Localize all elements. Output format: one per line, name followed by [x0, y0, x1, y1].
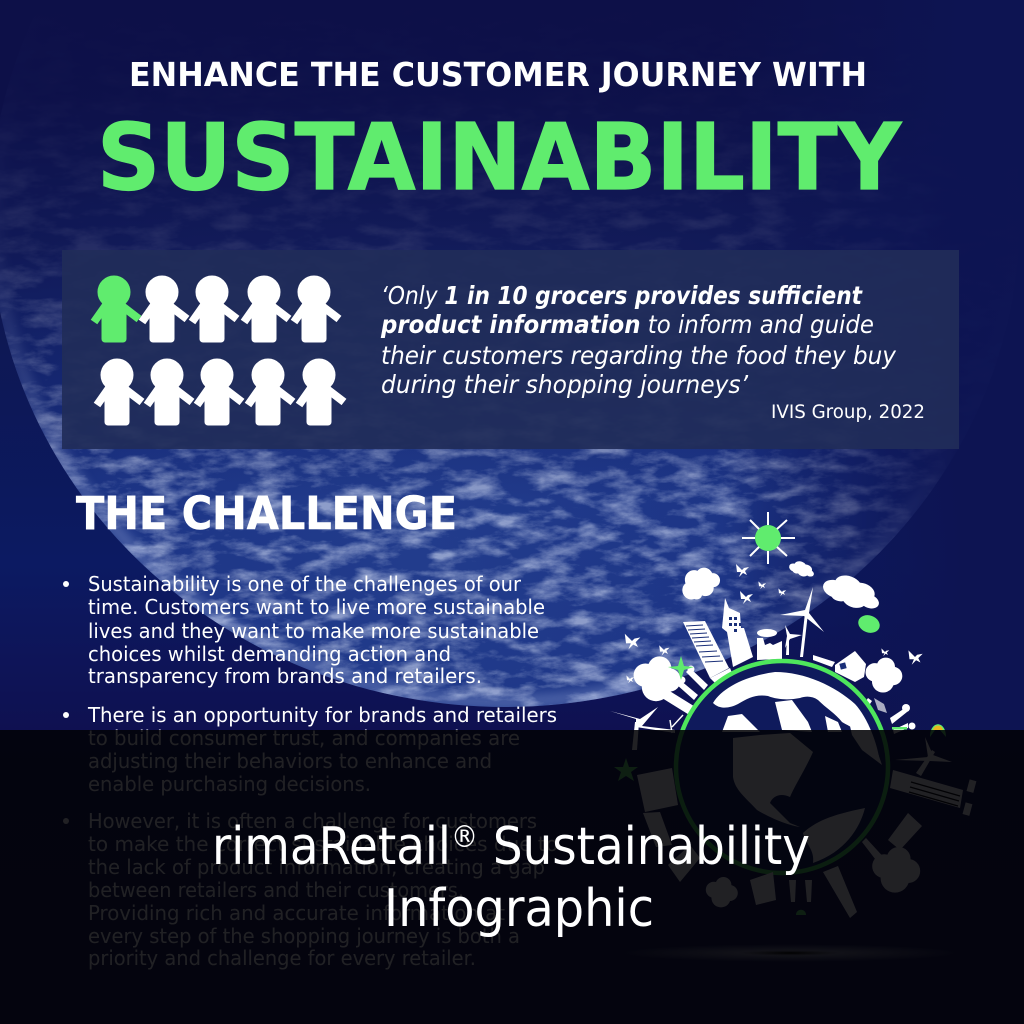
text block: challenge bullets: to make the correct sustainable choices due to [88, 832, 558, 856]
heading: the challenge: THE CHALLENGE [76, 487, 457, 540]
text block: challenge bullets: enable purchasing decisions. [88, 772, 371, 796]
icon: solar tower [683, 621, 735, 690]
icon: row of five people, one highlighted [94, 276, 339, 342]
icon: clouds [676, 558, 885, 636]
icon: lower solar panels and trees [637, 768, 922, 918]
text block: challenge bullets: choices whilst demanding action and [88, 642, 451, 666]
icon: house and vehicle [813, 651, 866, 682]
icon: wind turbines [610, 587, 952, 776]
quote text: during their shopping journeys’ [381, 370, 748, 399]
text block: challenge bullets: However, it is often a challenge for customers [88, 809, 537, 833]
text block: challenge bullets: priority and challenge for every retailer. [88, 946, 476, 970]
caption title: rimaRetail [212, 817, 477, 877]
icon: butterflies [625, 564, 923, 683]
icon: trees [634, 656, 902, 716]
icon: green ring around globe [676, 661, 888, 873]
ground shadow under globe [620, 944, 960, 962]
icon: sun [742, 512, 795, 564]
text block: challenge bullets: between retailers and their customers. [88, 878, 464, 902]
title: sustainability: SUSTAINABILITY [97, 104, 902, 211]
icon: lower right factory [890, 770, 976, 816]
quote source: IVIS Group, 2022 [771, 401, 925, 423]
icon: row of five people [97, 359, 344, 425]
quote text: their customers regarding the food they buy [381, 341, 896, 370]
quote text: ‘Only 1 in 10 grocers provides sufficient [381, 281, 863, 310]
caption overlay band [0, 730, 1024, 1024]
heading: enhance the customer journey with: ENHANCE THE CUSTOMER JOURNEY WITH [129, 55, 867, 94]
text block: challenge bullets: adjusting their behaviors to enhance and [88, 749, 492, 773]
background: planet earth with clouds [0, 0, 1024, 707]
text block: challenge bullets: There is an opportunity for brands and retailers [87, 703, 557, 727]
icon: people and bikes [676, 666, 916, 734]
icon: sustainable globe with city, turbines and trees [610, 512, 976, 918]
caption title: Sustainability [478, 817, 810, 877]
panel: 1 in 10 grocers statistic [62, 250, 959, 449]
text block: challenge bullets: lives and they want to make more sustainable [88, 619, 539, 643]
caption title: Infographic [384, 879, 654, 939]
icon: continents [713, 672, 882, 863]
quote text: product information to inform and guide [380, 310, 874, 339]
text block: challenge bullets: transparency from brands and retailers. [88, 664, 482, 688]
quote text [380, 281, 896, 399]
caption title: ® [451, 820, 478, 855]
text block: challenge bullets: to build consumer trust, and companies are [88, 726, 520, 750]
text block: challenge bullets: time. Customers want to live more sustainable [88, 595, 545, 619]
text block: challenge bullets: every step of the shopping journey is both a [88, 924, 520, 948]
caption title [212, 817, 810, 939]
text block: challenge bullets: Sustainability is one of the challenges of our [88, 572, 522, 596]
text block: challenge bullets: the lack of product information, creating a gap [88, 855, 545, 879]
icon: skyscraper [722, 598, 753, 667]
text block: challenge bullets: Providing rich and accurate information at [88, 901, 505, 925]
text block: challenge bullets [63, 572, 558, 970]
icon: factory [757, 629, 782, 660]
icon: small rainbow, stars and green accents [614, 656, 946, 915]
